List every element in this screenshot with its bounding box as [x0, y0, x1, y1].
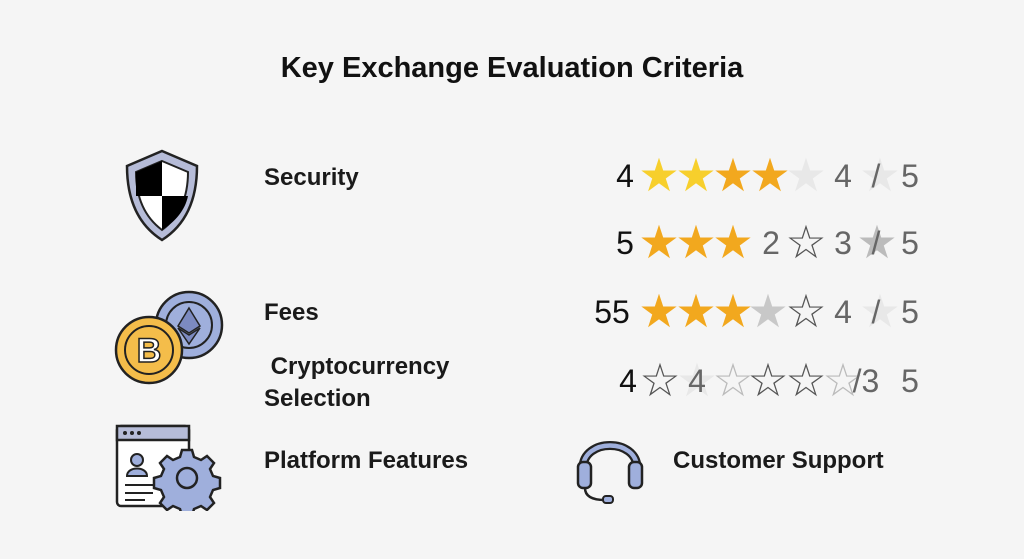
rating row 1: ★ — [859, 148, 901, 202]
rating row 4: 4 — [619, 363, 637, 399]
rating row 1: 5 — [901, 158, 919, 194]
rating row 1: ★ — [749, 148, 791, 202]
rating row 1: ★ — [785, 148, 827, 202]
rating row 4: ☆ — [639, 353, 681, 407]
rating row 3: ☆ — [785, 284, 827, 338]
rating row 1: ★ — [638, 148, 680, 202]
rating row 1: 4 — [616, 158, 634, 194]
rating row 1: ★ — [712, 148, 754, 202]
rating row 2: ☆ — [785, 215, 827, 269]
rating row 2: ★ — [638, 215, 680, 269]
rating row 2: 2 — [762, 225, 780, 261]
label: platform features: Platform Features — [264, 447, 468, 474]
rating row 2 — [616, 215, 919, 269]
rating row 4: 5 — [901, 363, 919, 399]
rating row 3: ★ — [712, 284, 754, 338]
rating row 1 — [616, 148, 919, 202]
rating row 3: 55 — [594, 294, 630, 330]
rating row 4 — [619, 353, 919, 407]
rating row 4: ☆ — [785, 353, 827, 407]
rating row 4: ☆ — [747, 353, 789, 407]
rating row 2: 3 — [834, 225, 852, 261]
title: Key Exchange Evaluation Criteria — [281, 52, 743, 84]
icon: headset — [576, 441, 644, 504]
label: fees: Fees — [264, 299, 319, 326]
rating row 2: 5 — [901, 225, 919, 261]
rating row 3: ★ — [638, 284, 680, 338]
label: crypto selection — [264, 353, 450, 412]
icon: coins — [114, 290, 224, 384]
rating row 2: / — [872, 225, 880, 261]
rating row 2: 5 — [616, 225, 634, 261]
rating row 2: ★ — [712, 215, 754, 269]
rating row 3: ★ — [747, 284, 789, 338]
rating row 4: ★ — [676, 353, 718, 407]
rating row 4: 4 — [688, 363, 706, 399]
label: security: Security — [264, 164, 359, 191]
rating row 3 — [594, 284, 919, 338]
rating row 1: 4 — [834, 158, 852, 194]
rating row 2: ★ — [675, 215, 717, 269]
rating row 4: /3 — [853, 363, 879, 399]
rating row 1: / — [872, 158, 880, 194]
rating row 3: ★ — [859, 284, 901, 338]
label: crypto selection: Selection — [264, 385, 371, 412]
rating row 2: ★ — [856, 215, 898, 269]
rating row 4: ☆ — [822, 353, 864, 407]
rating row 1: ★ — [675, 148, 717, 202]
rating row 3: 4 — [834, 294, 852, 330]
label: crypto selection: Cryptocurrency — [271, 353, 449, 380]
icon: shield — [126, 150, 198, 242]
rating row 3: / — [872, 294, 880, 330]
rating row 4: ☆ — [712, 353, 754, 407]
icon: coins: B — [137, 332, 161, 370]
icon: platform — [116, 424, 222, 511]
label: customer support: Customer Support — [673, 447, 884, 474]
rating row 3: ★ — [675, 284, 717, 338]
rating row 3: 5 — [901, 294, 919, 330]
